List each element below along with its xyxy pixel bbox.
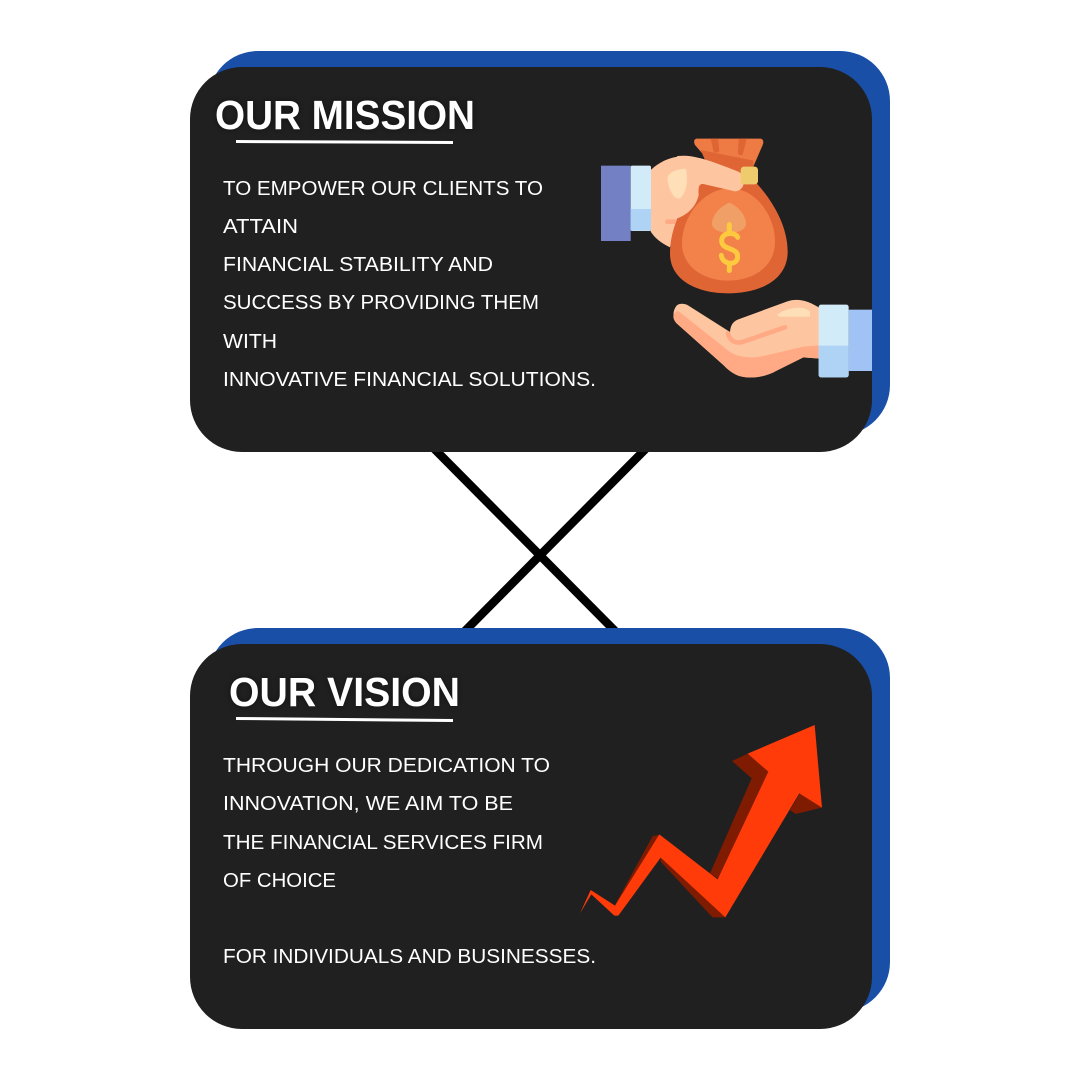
heading underline bbox=[236, 140, 453, 144]
bag neck bbox=[694, 139, 763, 167]
text block: mission statement: WITH bbox=[223, 331, 277, 353]
heading: our vision: OUR VISION bbox=[229, 669, 460, 715]
heading: our mission: OUR MISSION bbox=[215, 92, 475, 138]
vision dark card bbox=[190, 644, 872, 1029]
icon: hands exchanging money bag bbox=[601, 139, 872, 378]
text block: vision statement: OF CHOICE bbox=[223, 870, 336, 892]
dollar sign bbox=[721, 225, 738, 271]
icon: rising red arrow bbox=[580, 725, 822, 917]
heading: our vision: OUR VISION bbox=[229, 669, 460, 715]
upper fingers over bag bbox=[668, 156, 744, 218]
text block: vision statement: FOR INDIVIDUALS AND BUSINESSES. bbox=[223, 946, 596, 968]
vision blue backing card bbox=[208, 628, 890, 1012]
heading: our mission: OUR MISSION bbox=[215, 92, 475, 138]
text block: mission statement: FINANCIAL STABILITY AND bbox=[223, 254, 493, 276]
upper palm bbox=[651, 156, 705, 247]
text block: mission statement: TO EMPOWER OUR CLIENTS TO bbox=[223, 178, 543, 200]
panel: mission bbox=[190, 51, 890, 452]
text block: vision statement: INNOVATION, WE AIM TO BE bbox=[223, 793, 513, 815]
arrow shadow bbox=[615, 753, 822, 917]
text block: vision statement bbox=[223, 755, 596, 968]
mission dark card bbox=[190, 67, 872, 452]
money bag bbox=[670, 139, 788, 293]
mission blue backing card bbox=[208, 51, 890, 435]
text block: mission statement: SUCCESS BY PROVIDING THEM bbox=[223, 292, 539, 314]
arrow body bbox=[580, 725, 822, 917]
text block: vision statement: THE FINANCIAL SERVICES FIRM bbox=[223, 832, 543, 854]
lower hand bbox=[673, 300, 820, 378]
text block: mission statement: INNOVATIVE FINANCIAL SOLUTIONS. bbox=[223, 369, 596, 391]
lower sleeve bbox=[849, 310, 872, 371]
text block: mission statement: ATTAIN bbox=[223, 216, 298, 238]
text block: vision statement: THROUGH OUR DEDICATION TO bbox=[223, 755, 550, 777]
heading underline bbox=[236, 717, 453, 722]
upper sleeve bbox=[601, 166, 631, 241]
lower cuff bbox=[819, 305, 849, 377]
text block: mission statement bbox=[223, 178, 596, 391]
bag body bbox=[670, 159, 788, 293]
upper cuff bbox=[631, 166, 651, 231]
connector: crossed lines bbox=[430, 444, 650, 634]
panel: vision bbox=[190, 628, 890, 1029]
ring bbox=[741, 167, 758, 184]
